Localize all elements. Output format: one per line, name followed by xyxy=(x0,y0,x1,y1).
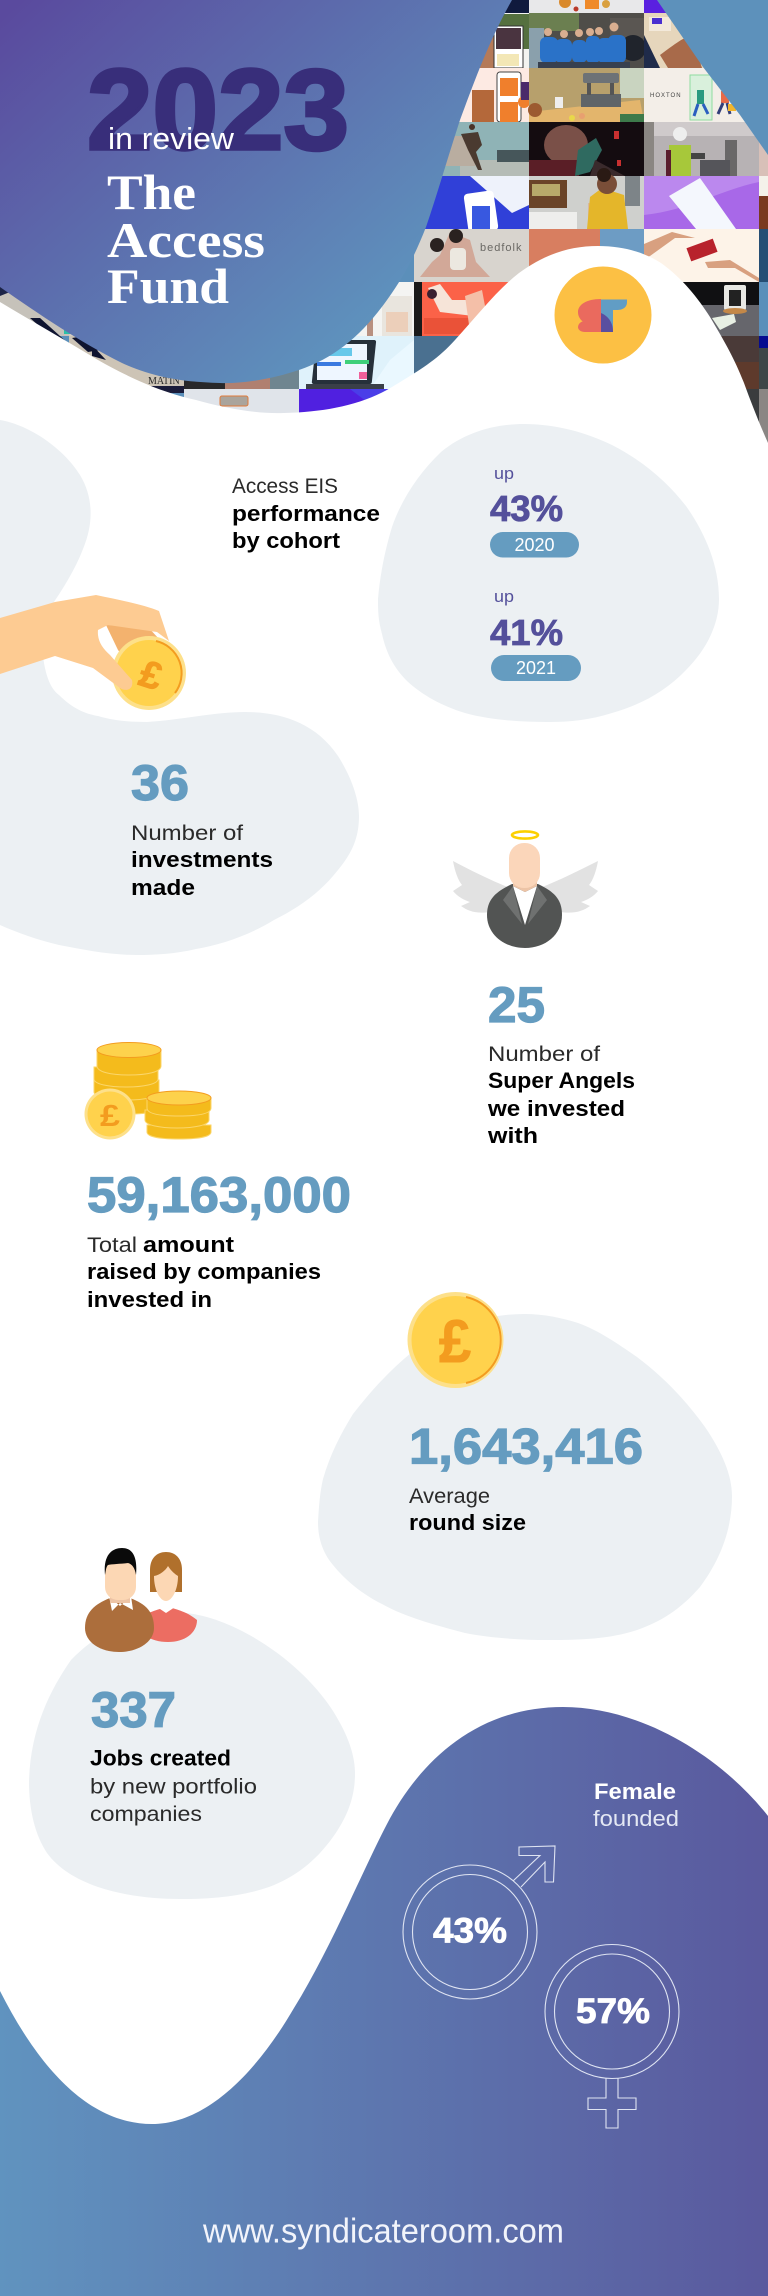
photo: lower right xyxy=(644,389,768,443)
stat: 41% up 2021: 41% xyxy=(490,612,563,653)
photo: workshop table xyxy=(528,68,644,122)
photo: engineer xyxy=(644,122,759,176)
panel: left blob investments xyxy=(0,420,359,955)
photo: can on grey xyxy=(184,389,299,443)
photo: laptop xyxy=(299,336,414,389)
stat: 25 super angels: we invested xyxy=(487,1096,625,1121)
photo: food tile xyxy=(529,0,644,13)
text: Access EIS performance by cohort xyxy=(232,475,380,553)
text: Female founded: Female xyxy=(594,1779,676,1804)
photo: woman in yellow xyxy=(529,168,644,229)
photo: navy and teal strip xyxy=(0,282,184,393)
title: The Access Fund: Access xyxy=(107,212,265,268)
photo: runner xyxy=(414,122,529,176)
stat: 337 jobs created: 337 xyxy=(91,1682,176,1738)
panel: header background xyxy=(0,0,768,460)
text: Access EIS performance by cohort: Access EIS xyxy=(232,475,338,498)
photo: hoxton illustration: HOXTON xyxy=(650,93,682,99)
stat: 59,163,000 total raised: amount xyxy=(143,1232,235,1257)
photo: navy edge tile xyxy=(759,336,768,389)
icon: hand holding coin: £ xyxy=(134,653,167,699)
stat: 337 jobs created xyxy=(90,1682,257,1826)
photo: hoxton illustration xyxy=(644,68,759,122)
text: Access EIS performance by cohort: performance xyxy=(232,501,380,526)
icon: stacked gold coins: £ xyxy=(100,1098,120,1133)
stat: 41% up 2021: up xyxy=(494,587,514,606)
icon: man and woman xyxy=(85,1548,197,1652)
stat: 59,163,000 total raised xyxy=(87,1167,351,1312)
stat: 1,643,416 average round size: round size xyxy=(409,1510,526,1535)
panel: jobs blob xyxy=(29,1613,355,1899)
panel: white wave under collage xyxy=(0,246,768,470)
photo: dark machine xyxy=(529,122,644,176)
stat: 337 jobs created: by new portfolio xyxy=(90,1776,257,1798)
stat: 41% up 2021: 2021 xyxy=(516,658,556,678)
stat: 1,643,416 average round size xyxy=(409,1418,643,1535)
stat: 36 investments: 36 xyxy=(131,755,189,811)
text: website url: www.syndicateroom.com xyxy=(202,2212,564,2250)
photo: woman on red sofa xyxy=(414,282,529,336)
icon: stacked gold coins xyxy=(84,1042,211,1140)
photo: dark tile xyxy=(414,0,529,13)
stat: 59,163,000 total raised: 59,163,000 xyxy=(87,1167,351,1223)
photo: purple phone xyxy=(644,176,759,229)
stat: 25 super angels: Number of xyxy=(488,1043,600,1066)
panel: EIS performance blob xyxy=(378,424,719,722)
stat: 25 super angels: Super Angels xyxy=(488,1068,635,1093)
icon: SyndicateRoom logo xyxy=(554,266,652,364)
photo: snack bar hands xyxy=(644,229,759,282)
panel: top gradient blob xyxy=(0,0,512,383)
photo: mug on sofa xyxy=(683,282,759,336)
icon: super angel xyxy=(453,831,598,948)
heading: in review: in review xyxy=(108,121,235,156)
text: Access EIS performance by cohort: by cohort xyxy=(232,528,341,553)
stat: 36 investments: Number of xyxy=(131,822,243,845)
photo: purple banner xyxy=(299,389,414,443)
panel: bottom gradient wave xyxy=(0,1707,768,2296)
stat: 59,163,000 total raised: Total xyxy=(87,1234,137,1257)
photo: pink edge tile xyxy=(759,122,768,176)
photo: blue app xyxy=(414,176,529,234)
photo: hands and watch xyxy=(644,13,759,68)
photo: blue edge tile xyxy=(759,229,768,282)
stat: 36 investments: investments xyxy=(131,847,273,872)
photo: hand on dark xyxy=(184,336,299,389)
icon: female symbol 57%: 57% xyxy=(576,1992,650,2031)
title: The Access Fund xyxy=(107,164,265,314)
photo: phone on pink xyxy=(414,68,530,122)
icon: hand holding coin xyxy=(0,595,186,710)
stat: 337 jobs created: companies xyxy=(90,1803,202,1826)
heading: 2023: 2023 xyxy=(87,47,349,174)
photo: coffee bag xyxy=(299,282,414,336)
stat: 41% up 2021 xyxy=(490,587,581,681)
photo: bedfolk: bedfolk xyxy=(480,242,522,254)
text: Female founded: founded xyxy=(593,1806,679,1831)
photo: app on phone xyxy=(414,13,529,68)
stat: 25 super angels xyxy=(487,977,635,1148)
photo: orange edge tile xyxy=(759,176,768,229)
photo: team in blue xyxy=(529,13,646,68)
photo: matin packaging xyxy=(69,336,184,389)
icon: pound coin xyxy=(408,1292,504,1388)
icon: pound coin: £ xyxy=(439,1308,471,1375)
stat: 43% up 2020: 43% xyxy=(490,488,563,529)
photo collage grid xyxy=(0,0,768,443)
stat: 36 investments: made xyxy=(131,875,195,900)
stat: 43% up 2020: up xyxy=(494,464,514,483)
icon: female symbol 57% xyxy=(545,1944,679,2128)
photo: fingers xyxy=(529,229,644,282)
icon: male symbol 43%: 43% xyxy=(433,1912,507,1950)
stat: 25 super angels: with xyxy=(487,1123,538,1148)
stat: 1,643,416 average round size: 1,643,416 xyxy=(409,1418,643,1474)
icon: male symbol 43% xyxy=(403,1846,555,1999)
stat: 59,163,000 total raised: invested in xyxy=(87,1287,212,1312)
stat: 43% up 2020: 2020 xyxy=(514,535,555,555)
photo: purple tile xyxy=(644,0,674,13)
title: The Access Fund: The xyxy=(107,164,196,220)
photo: wood table xyxy=(644,336,759,389)
stat: 43% up 2020 xyxy=(490,464,579,558)
text: Female founded xyxy=(593,1779,679,1831)
photo: bedfolk xyxy=(414,229,529,282)
title: The Access Fund: Fund xyxy=(107,258,229,314)
photo: jeans xyxy=(414,336,529,389)
stat: 1,643,416 average round size: Average xyxy=(409,1485,490,1508)
stat: 59,163,000 total raised: raised by companies xyxy=(87,1259,321,1284)
panel: top right gradient corner xyxy=(657,0,768,155)
photo: matin packaging: MATIN xyxy=(148,376,180,387)
stat: 337 jobs created: Jobs created xyxy=(90,1746,231,1770)
panel: round size blob xyxy=(318,1314,732,1640)
stat: 25 super angels: 25 xyxy=(488,977,545,1033)
stat: 36 investments xyxy=(131,755,273,900)
